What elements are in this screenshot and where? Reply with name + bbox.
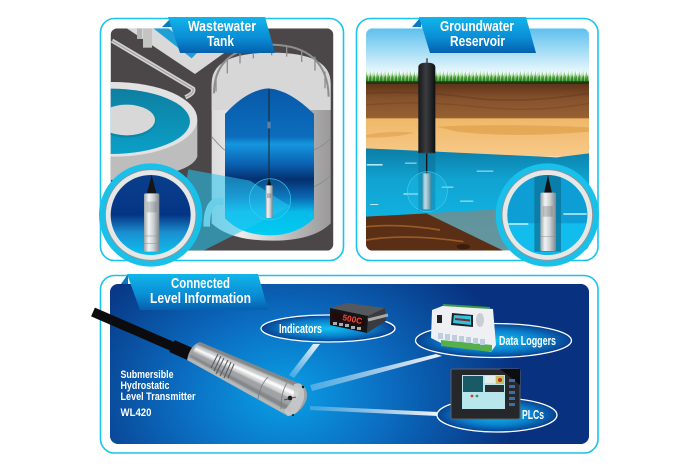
oval: data loggers: Data Loggers: [499, 333, 556, 348]
device: indicator: [330, 303, 388, 333]
heading: connected level information: Connected: [171, 275, 230, 292]
device: PLC touchscreen: [451, 369, 520, 419]
pipe: [207, 202, 223, 227]
connection beams: [289, 344, 442, 416]
clarifier tank: [110, 82, 198, 180]
device: indicator: 500C: [342, 312, 363, 326]
illustration: wastewater plant: [110, 28, 334, 251]
oval: PLCs: PLCs: [522, 407, 544, 422]
device: data logger: [431, 305, 496, 352]
heading: wastewater tank: Wastewater: [188, 18, 256, 35]
oval: indicators: Indicators: [279, 322, 322, 336]
heading: connected level information: [121, 274, 268, 310]
small sensor: [407, 172, 447, 212]
panel: groundwater reservoir: [356, 18, 599, 267]
light beam: [186, 169, 290, 250]
storage tank: [212, 45, 331, 241]
panel: connected level information: [93, 276, 598, 453]
sensor close-up: [144, 175, 159, 252]
magnifier lens: [99, 163, 202, 267]
product description: WL420: [120, 407, 152, 419]
oval: data loggers: [416, 324, 572, 358]
cable and sensor: [93, 312, 315, 425]
product description: Hydrostatic: [120, 380, 170, 392]
small sensor: [266, 178, 273, 218]
heading: groundwater reservoir: [412, 17, 536, 53]
heading: groundwater reservoir: Groundwater: [440, 18, 514, 35]
product description: [120, 369, 196, 419]
oval: indicators: [261, 315, 395, 342]
oval: PLCs: [437, 398, 557, 432]
panel: wastewater tank: [99, 18, 344, 267]
magnifier lens: [496, 163, 599, 267]
illustration: ground cross-section: [366, 28, 589, 251]
heading: groundwater reservoir: Reservoir: [450, 33, 505, 50]
heading: connected level information: Level Information: [150, 290, 251, 307]
heading: wastewater tank: [162, 17, 275, 53]
sensor close-up: [540, 175, 556, 251]
product description: Submersible: [120, 369, 174, 381]
heading: wastewater tank: Tank: [207, 33, 235, 50]
bedrock: [366, 213, 503, 251]
well casing: [418, 58, 435, 211]
product description: Level Transmitter: [120, 391, 196, 403]
